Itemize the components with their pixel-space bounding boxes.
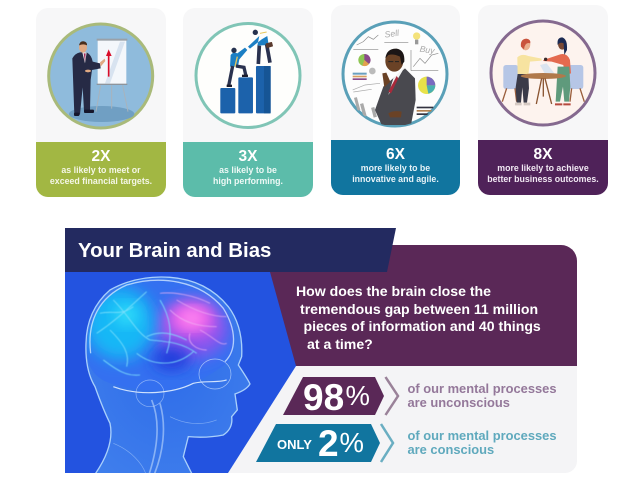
panel: your brain and bias (65, 228, 577, 477)
icon: thinking businessman with charts: Sell (384, 28, 401, 40)
icon: presenter with flip chart (49, 24, 153, 128)
panel: card 1 financial targets (36, 8, 166, 197)
heading: Your Brain and Bias (78, 240, 271, 262)
card 3 footer band (331, 140, 460, 195)
stat badge: 98%: % (346, 380, 370, 411)
illustration: glowing head and brain (80, 270, 250, 477)
panel: card 2 high performing (183, 8, 313, 197)
stat: 6X: 6X (386, 146, 406, 163)
question text: pieces of information and 40 things (304, 318, 541, 334)
text: card 2 description: as likely to be (219, 165, 277, 175)
stat: 3X: 3X (239, 148, 258, 165)
panel: card 4 business outcomes (478, 5, 608, 195)
purple question panel (250, 245, 577, 366)
stat badge: only 2%: % (340, 427, 364, 458)
gray stats background (65, 366, 577, 473)
question text: at a time? (307, 336, 373, 352)
text: card 4 description: better business outcomes. (487, 174, 599, 184)
text: card 3 description: innovative and agile. (352, 174, 439, 184)
stat badge: only 2%: 2 (318, 423, 339, 464)
stat badge: only 2% (256, 423, 380, 464)
text: card 4 description: more likely to achieve (497, 163, 589, 173)
text: card 1 description: as likely to meet or (61, 165, 141, 175)
header banner (65, 228, 396, 272)
card 1 footer band (36, 142, 166, 197)
arrow: 98% chevron (386, 377, 398, 415)
text: unconscious: are unconscious (408, 395, 510, 410)
text: conscious: of our mental processes (408, 428, 557, 443)
text: unconscious: of our mental processes (408, 381, 557, 396)
icon: people climbing bars (196, 24, 300, 128)
icon: thinking businessman with charts: Buy (419, 44, 436, 56)
stat: 8X: 8X (534, 146, 553, 163)
text: card 1 description: exceed financial targets. (50, 176, 152, 186)
stat badge: 98% (283, 377, 384, 418)
stat badge: 98%: 98 (303, 377, 344, 418)
card 2 footer band (183, 142, 313, 197)
card 4 footer band (478, 140, 608, 195)
arrow: 2% chevron (381, 424, 393, 462)
stat: 2X: 2X (92, 148, 111, 165)
icon: thinking businessman with charts (343, 22, 447, 126)
question text: tremendous gap between 11 million (300, 301, 538, 317)
panel: card 3 innovative and agile (331, 5, 460, 195)
icon: people shaking hands at table (491, 21, 595, 125)
text: card 3 description: more likely to be (361, 163, 430, 173)
blue brain panel (65, 272, 296, 473)
stat badge: only 2%: ONLY (277, 437, 312, 452)
question text: How does the brain close the (296, 283, 491, 299)
text: conscious: are conscious (408, 442, 494, 457)
text: card 2 description: high performing. (213, 176, 283, 186)
